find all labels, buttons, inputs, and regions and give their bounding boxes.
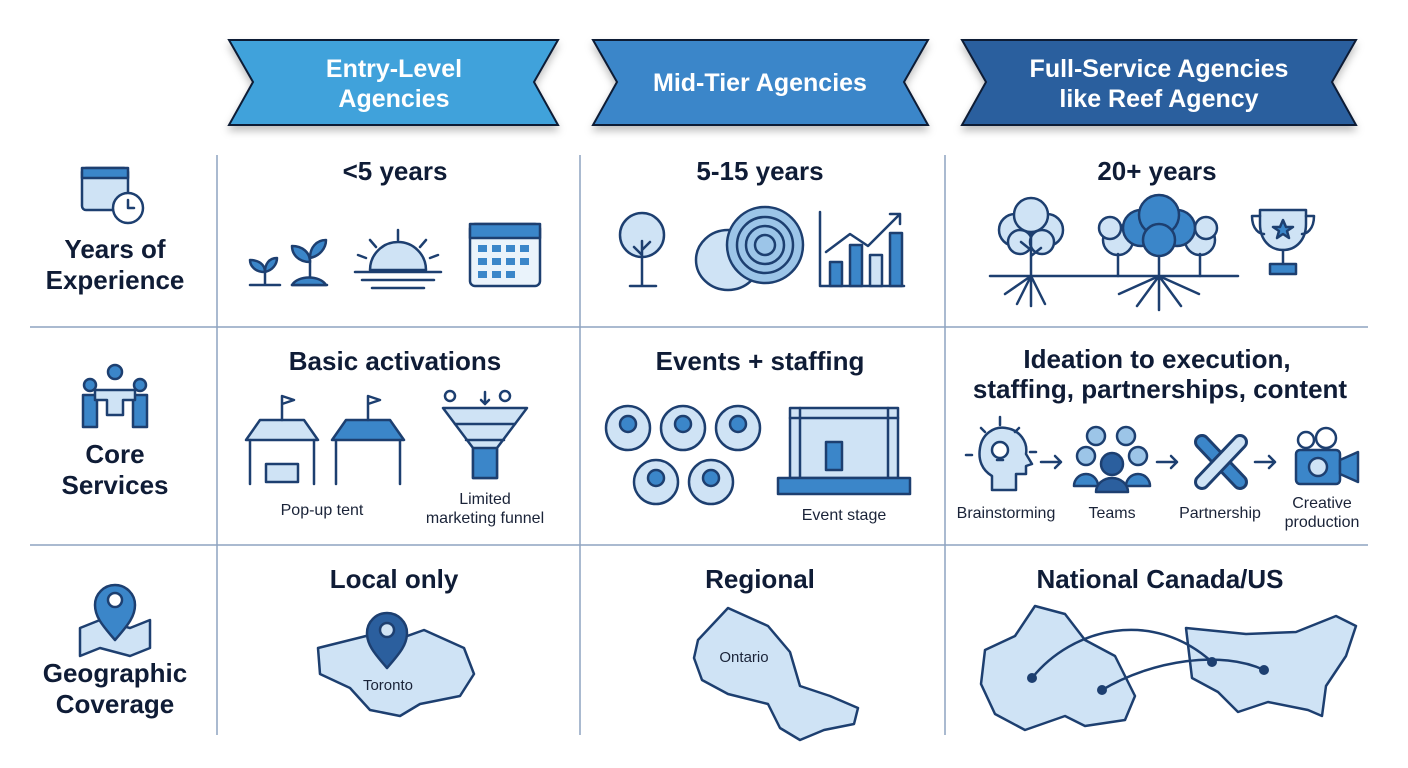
map: Ontario xyxy=(694,608,858,740)
cell: Ideation to execution: production xyxy=(1285,514,1359,531)
cell: 5-15 years xyxy=(620,156,904,290)
icon: calendar clock xyxy=(82,168,143,223)
row label: Years of Experience: Experience xyxy=(46,265,184,295)
cell: National Canada/US: National Canada/US xyxy=(1036,564,1284,594)
banner: Mid-Tier Agencies: Mid-Tier Agencies xyxy=(653,69,867,97)
icon: event stage xyxy=(778,408,910,494)
row label: Geographic Coverage: Coverage xyxy=(56,689,174,719)
icon: calendar xyxy=(470,224,540,286)
row label: Core Services: Services xyxy=(62,470,168,500)
cell: Basic activations: marketing funnel xyxy=(426,510,544,527)
icon: trophy xyxy=(1252,210,1314,274)
cell: 5-15 years: 5-15 years xyxy=(696,156,824,186)
cell: <5 years xyxy=(250,156,540,288)
banner: Full-Service Agencies: Full-Service Agencies xyxy=(1030,55,1288,83)
cell: Local only xyxy=(318,564,474,716)
banner: Mid-Tier Agencies xyxy=(593,40,928,125)
cell: 20+ years xyxy=(990,156,1314,310)
banner: Entry-Level Agencies: Entry-Level xyxy=(326,55,462,83)
cell: 20+ years: 20+ years xyxy=(1097,156,1217,186)
icon: teams xyxy=(1074,427,1150,492)
row label: Geographic Coverage: Geographic xyxy=(43,658,187,688)
cell: Regional xyxy=(694,564,858,740)
icon: map pin xyxy=(80,585,150,656)
cell: Ideation to execution: staffing, partnerships, content xyxy=(973,374,1347,404)
banner: Entry-Level Agencies xyxy=(229,40,558,125)
cell: Ideation to execution: Creative xyxy=(1292,495,1352,512)
icon: staff faces xyxy=(606,406,760,504)
cell: Local only: Toronto xyxy=(363,677,413,694)
map: Toronto xyxy=(318,613,474,716)
icon: bar chart xyxy=(820,212,904,286)
icon: partnership links xyxy=(1202,442,1240,482)
icon: people xyxy=(83,365,147,427)
icon: brainstorm head xyxy=(966,417,1036,490)
cell: Ideation to execution: Teams xyxy=(1088,505,1136,522)
arrow xyxy=(1041,456,1061,468)
cell: Local only: Local only xyxy=(330,564,459,594)
row label: Geographic Coverage xyxy=(43,585,187,719)
cell: Events + staffing: Event stage xyxy=(802,507,886,524)
banner: Full-Service Agencies: like Reef Agency xyxy=(1059,85,1259,113)
icon: roots trees xyxy=(990,195,1238,310)
cell: Events + staffing xyxy=(606,346,910,524)
cell: Events + staffing: Events + staffing xyxy=(656,346,864,376)
banner: Entry-Level Agencies: Agencies xyxy=(338,85,450,113)
cell: Basic activations: Limited xyxy=(459,491,511,508)
row label: Core Services: Core xyxy=(85,439,145,469)
row label: Core Services xyxy=(62,365,168,500)
icon: camera xyxy=(1296,428,1358,484)
cell: National Canada/US xyxy=(981,564,1356,730)
cell: Basic activations: Pop-up tent xyxy=(281,502,364,519)
cell: Ideation to execution: Ideation to execution, xyxy=(1023,344,1291,374)
icon: tree xyxy=(620,213,664,286)
banner: Full-Service Agencies xyxy=(962,40,1356,125)
grid lines xyxy=(30,155,1368,735)
cell: Ideation to execution: Partnership xyxy=(1179,505,1261,522)
cell: Basic activations: Basic activations xyxy=(289,346,501,376)
icon: sunrise xyxy=(355,230,441,288)
cell: Basic activations xyxy=(246,346,544,527)
row label: Years of Experience xyxy=(46,168,184,295)
cell: Regional: Ontario xyxy=(719,649,769,666)
icon: tree rings xyxy=(696,207,803,290)
arrow xyxy=(1255,456,1275,468)
map: USA xyxy=(1186,616,1356,716)
cell: Ideation to execution xyxy=(957,344,1359,531)
arrow xyxy=(1157,456,1177,468)
cell: <5 years: <5 years xyxy=(343,156,447,186)
row label: Years of Experience: Years of xyxy=(64,234,166,264)
connection arcs xyxy=(1032,630,1264,690)
map: Canada xyxy=(981,606,1135,730)
icon: funnel xyxy=(443,391,527,478)
cell: Regional: Regional xyxy=(705,564,815,594)
cell: Ideation to execution: Brainstorming xyxy=(957,505,1055,522)
icon: sprouts xyxy=(250,240,327,285)
icon: pop-up tents xyxy=(246,396,404,484)
